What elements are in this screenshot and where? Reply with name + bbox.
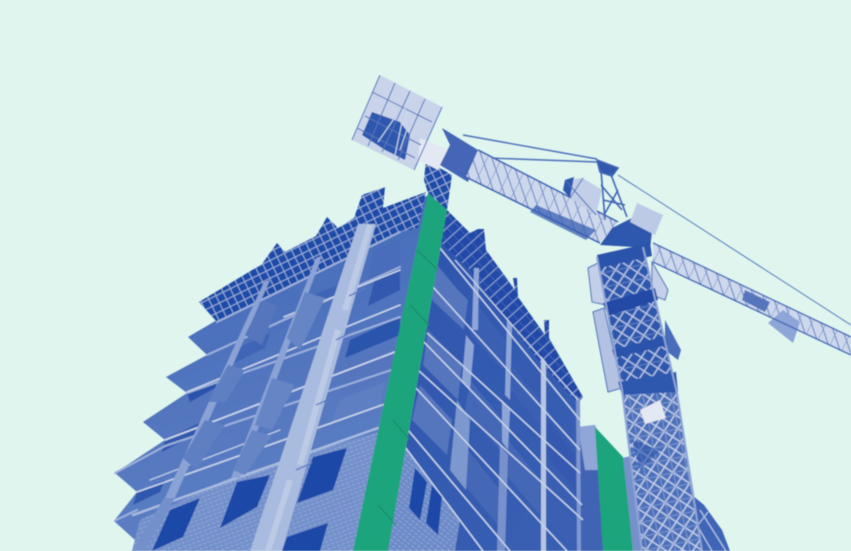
green strip main xyxy=(353,193,447,551)
main pale column xyxy=(250,224,376,551)
mast upper housing guards xyxy=(588,262,606,305)
secondary columns xyxy=(132,256,325,551)
crane right jib xyxy=(653,243,851,355)
green strip second block xyxy=(595,427,633,551)
building left facade xyxy=(114,187,428,551)
block behind the crane xyxy=(578,425,730,551)
brick lower wall xyxy=(132,432,378,551)
crane cab xyxy=(600,203,663,248)
crane top column stub xyxy=(424,160,452,210)
slab edges xyxy=(114,232,400,521)
building right facade xyxy=(388,210,583,551)
ceiling bays xyxy=(412,265,575,551)
windows xyxy=(152,448,347,551)
brick lower corner xyxy=(388,447,460,551)
roof scaffold right xyxy=(441,210,583,403)
floor lines xyxy=(405,248,583,551)
columns xyxy=(450,268,581,551)
crane mast xyxy=(588,243,702,551)
crane main jib xyxy=(466,150,618,243)
dark bays under slabs xyxy=(368,267,400,306)
crane stay cables xyxy=(463,135,851,325)
roof scaffold left xyxy=(199,187,426,322)
right facade windows xyxy=(409,468,442,535)
crane counterweight platform xyxy=(352,75,478,182)
green strip shading xyxy=(378,250,438,525)
crane cat head xyxy=(597,160,627,220)
